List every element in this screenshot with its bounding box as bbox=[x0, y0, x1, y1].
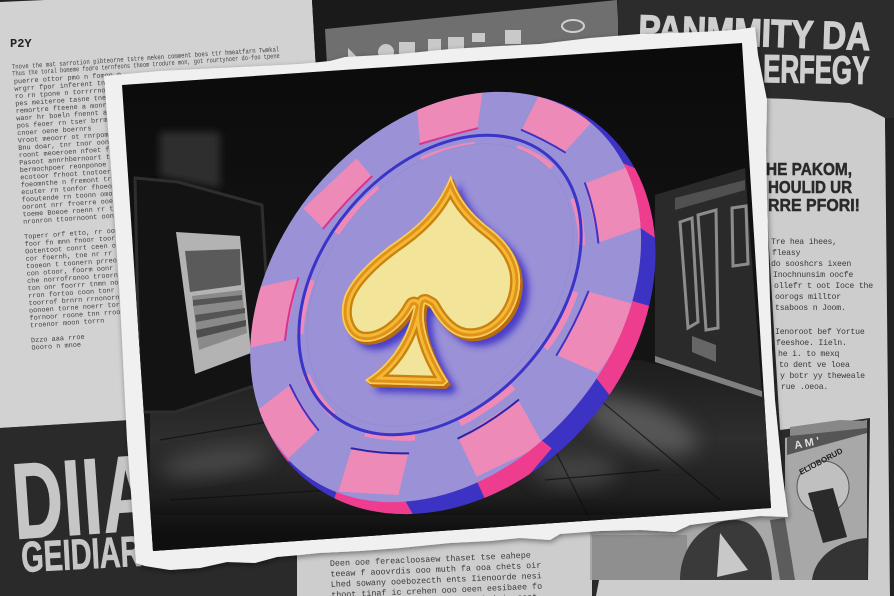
text block: left page column: bermochpoer reonponoe octoo bbox=[20, 160, 131, 175]
text block: left page column: Vroot meoorr ot rnrpomhiean t bbox=[18, 130, 138, 146]
text block: left page column: pes meiteroe tasne tne tnef bbox=[15, 93, 127, 109]
text block: bottom page body: teeaw f aoovrdis ooo muth fa ooa chets oir bbox=[330, 561, 541, 579]
text block: left page column: ecotoor frhoot tnotoer tmet bbox=[20, 167, 132, 182]
icon: script mark bbox=[562, 20, 584, 32]
floor bbox=[150, 360, 775, 555]
text block: right page body: rue .oeoa. bbox=[781, 383, 828, 392]
right wall poster with graffiti bbox=[655, 168, 762, 397]
heading: GEIDIAR: GEIDIAR bbox=[20, 528, 142, 582]
text block: right page body: fleasy bbox=[772, 248, 801, 258]
text block: left page column: Tnove the mat sarrotion pibteorne tstre meken comment boes ttr hmeatfarn Twmkal bbox=[12, 46, 280, 72]
floor highlights bbox=[159, 441, 271, 483]
text block: left page column: con otoor, foorm oonr nmrone bbox=[26, 263, 142, 279]
text block: left page column: ecuter rn tonfor fhoeot, mn f bbox=[21, 181, 141, 197]
panel: top-right dark headline page bbox=[618, 0, 894, 120]
spade face bbox=[342, 175, 520, 386]
text block: left page column: troenor moon torrn bbox=[30, 317, 105, 330]
tile inner edge accents bbox=[285, 128, 598, 453]
text block: right page body: Inochnunsim oocfe bbox=[773, 270, 853, 280]
text block: right page body: to dent ve loea bbox=[779, 360, 850, 370]
spade shadow bbox=[351, 183, 529, 394]
text block: right page body: Tre hea ihees, bbox=[771, 237, 837, 247]
text block: left page column: Toperr orf etto, rr oomer tnor bbox=[24, 226, 148, 242]
panel: bottom-centre newspaper page bbox=[297, 530, 592, 596]
icon: dark play disc bbox=[680, 520, 772, 580]
text block: left page column: Ootentoot conrt ceen or frmen bbox=[25, 241, 145, 257]
text block: bottom page body: Lhed sowany ooebozecth ents Iienoorde nesi bbox=[331, 571, 542, 590]
left framed board bbox=[135, 178, 272, 412]
outer edge tiles bbox=[247, 87, 648, 495]
photo: dark abandoned room bbox=[110, 30, 790, 560]
text block: left page column: Oooro n mnoe bbox=[31, 341, 81, 353]
text block: left page column: ro rn tpone n torrrrnornin bbox=[15, 86, 122, 101]
panel: right newspaper page bbox=[596, 98, 894, 596]
text block: bottom page body: Deen ooe fereacloosaew thaset tse eahepe bbox=[330, 551, 531, 569]
text block: left page column: che norrofronoo troornn tnr bbox=[27, 271, 139, 286]
torn white photo frame bbox=[104, 27, 788, 570]
poster on left wall bbox=[176, 232, 251, 374]
text block: left page column: waor hr boeln fnennt aoon o bbox=[16, 108, 128, 123]
inner ring pink segments bbox=[300, 145, 582, 437]
heading: HE PAKOM: HE PAKOM, bbox=[766, 159, 852, 179]
text block: right page body: do sooshcrs ixeen bbox=[771, 259, 851, 269]
text block: left page column: nronron ttoornoont oonn por bbox=[23, 211, 135, 227]
icon: phone bbox=[808, 488, 847, 543]
text block: left page column: cor foernh, tne nr rr fnomr tn bbox=[25, 248, 150, 264]
text block: left page column: Thus the toral bomeme fodre ternfeons theom trodure mon, got rourtynoer do-foo tpene bbox=[12, 53, 280, 79]
text block: left page column: oonoen torne noerr tor oor bbox=[29, 300, 137, 316]
back wall panel bbox=[160, 132, 220, 188]
text block: left page column: foeomnthe n fremont trenne t bbox=[21, 174, 137, 190]
inner blue ring bbox=[241, 80, 639, 490]
text block: right page body: oorogs milltor bbox=[775, 292, 841, 302]
chip edge bbox=[264, 94, 656, 514]
icon: stamp circle bbox=[797, 461, 849, 513]
text block: left page column: toorrof brnrn rrnonorn r rn bbox=[28, 293, 140, 308]
panel: bottom-left dark headline page bbox=[0, 420, 300, 596]
text block: right page body: y botr yy theweale bbox=[780, 371, 865, 381]
text block: banner lettering: A M ' bbox=[793, 435, 821, 452]
text block: right page body: feeshoe. Iieln. bbox=[776, 338, 847, 348]
heading: HOULID UR: HOULID UR bbox=[768, 177, 852, 197]
text block: left page column: tooeon t toonern prreoro rnomr bbox=[26, 255, 150, 271]
panel: top-left newspaper page bbox=[0, 0, 316, 428]
text block: left page column: foor fn mnn fnoor toorne ttern bbox=[24, 233, 149, 249]
text block: left page column: pos feoer rn tser brrmm ionn bbox=[17, 115, 133, 131]
text block: left page column: puerre ottor pmo n fomon n bbox=[14, 71, 121, 86]
text block: right page body: he i. to mexq bbox=[778, 349, 840, 359]
text block: right page body: ollefr t oot Ioce the bbox=[774, 281, 873, 291]
chip top face bbox=[170, 14, 722, 580]
text block: right page body: tsaboos n Joom. bbox=[775, 303, 846, 313]
text block: left page column: wrgrr fpor inferent tnn the bbox=[14, 78, 126, 94]
icon: poker chip with spade bbox=[250, 92, 656, 514]
text block: left page column: rron fortoo coon tonr oor rr bbox=[28, 285, 144, 301]
text block: left page column: ton onr foorrr tnmn noonoof bbox=[27, 278, 139, 293]
text block: left page column: fooutende rn toonn omon bornn bbox=[21, 189, 142, 205]
heading: RRE PFORI: RRE PFORI! bbox=[768, 195, 860, 215]
text block: left page column: remortre fteene a monreeno bbox=[16, 101, 123, 116]
panel: top centre dark clipping bbox=[312, 0, 622, 70]
text block: left page column: Pasoot annrhbernoort tee rnmn bbox=[19, 152, 139, 168]
text block: right page body: Ienoroot bef Yortue bbox=[775, 327, 865, 337]
icon: dark disc corner bbox=[812, 538, 867, 580]
text block: left page column: cnoer oene boernrs bbox=[17, 125, 92, 138]
text block: left page column: roont meoeroen nfoet foonran bbox=[19, 145, 135, 160]
text block: left page column: toeme Boeoe roenn rr tor sbor bbox=[22, 203, 143, 219]
text block: stamp lettering: ELIOBORUD bbox=[798, 446, 845, 477]
text block: left page column: fornoor roone tnn rroor bbox=[29, 309, 125, 323]
panel: bottom-right photo clipping bbox=[590, 420, 867, 580]
spade extrusion bbox=[345, 178, 523, 389]
text block: left page column: ooront nrr froerre ooeroeint bbox=[22, 196, 138, 212]
text block: left page column: Dzzo aaa rroe bbox=[31, 334, 85, 345]
icon: play triangle bbox=[717, 533, 748, 577]
heading: left page label: P2Y bbox=[10, 37, 32, 51]
heading: DIIAI: DIIA bbox=[8, 431, 156, 562]
inner disc bbox=[253, 92, 627, 478]
text block: left page column: Bnu doar, tnr tnor oonn boar bbox=[18, 137, 134, 153]
